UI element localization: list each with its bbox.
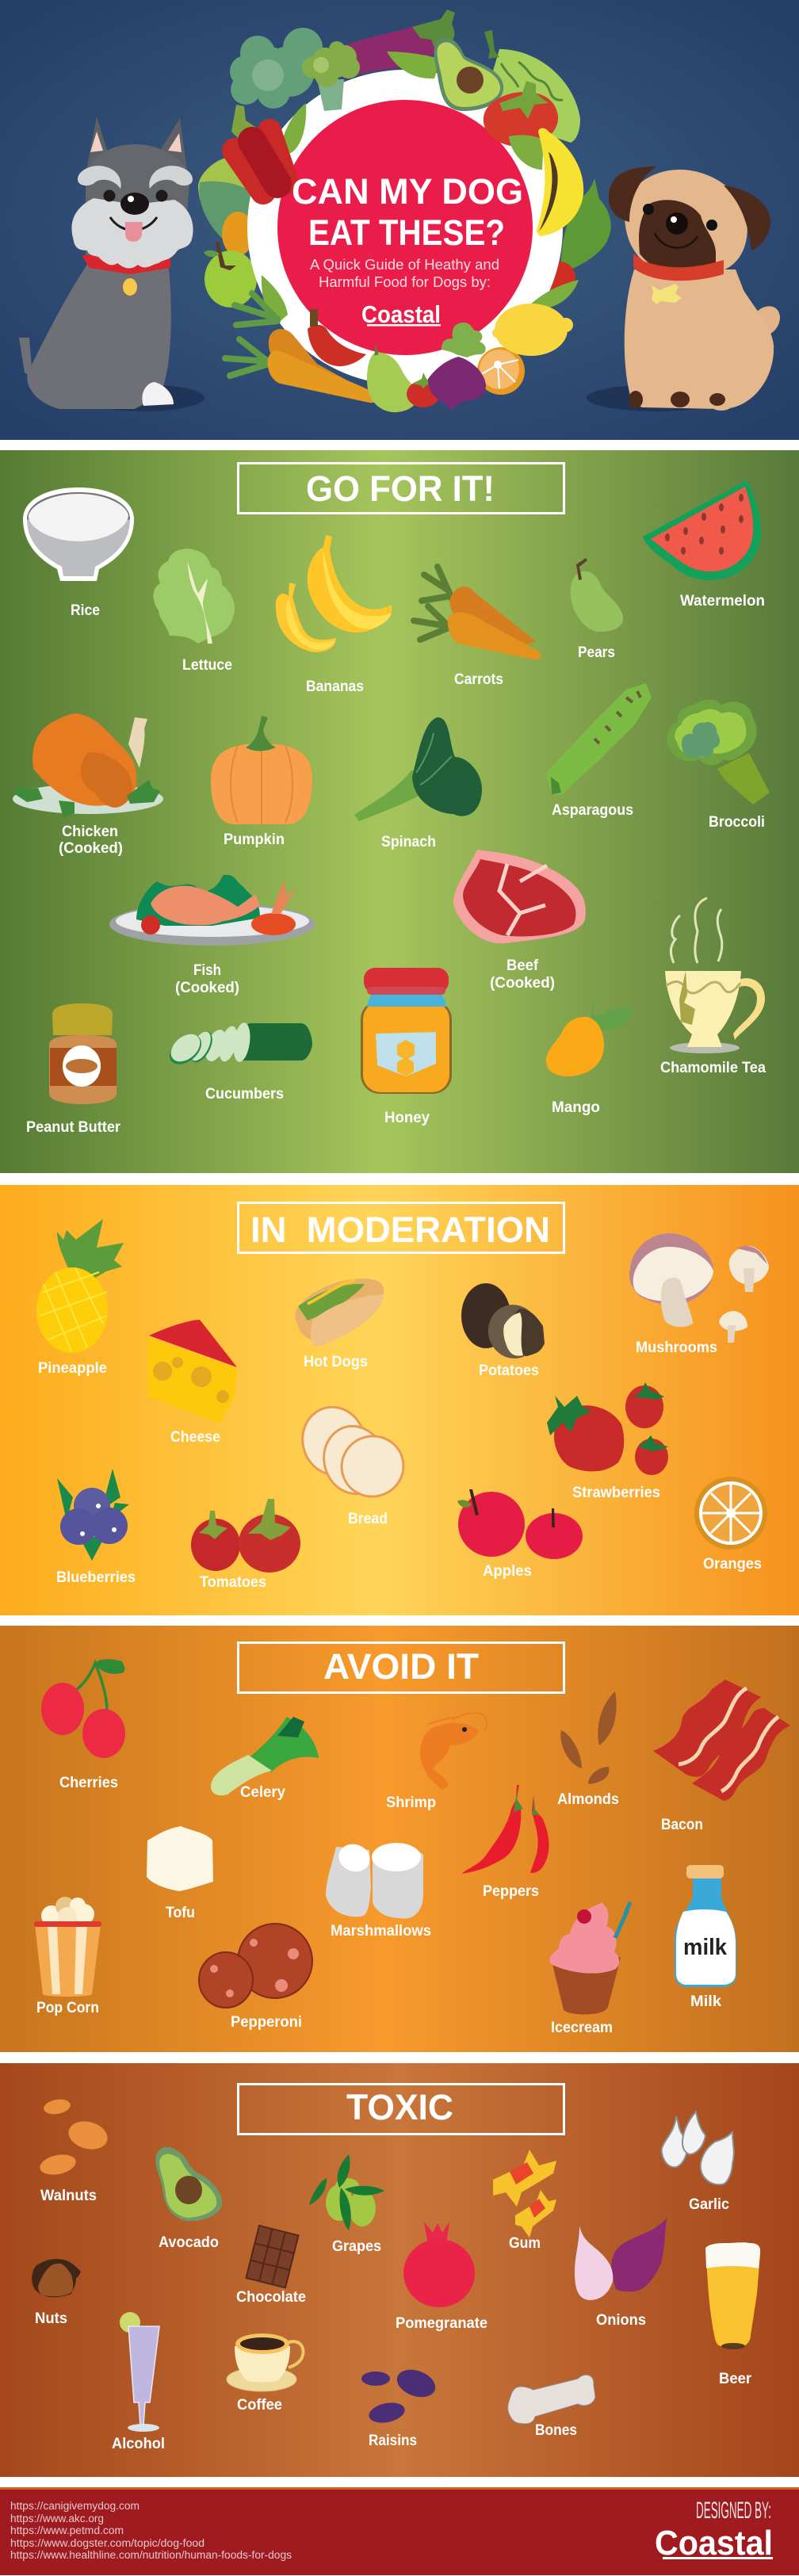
icon: cabbage xyxy=(198,158,254,243)
text: sources xyxy=(10,2500,292,2561)
icon: shrimp xyxy=(420,1713,487,1790)
icon: potatoes xyxy=(461,1283,545,1364)
icon: avocado half xyxy=(434,37,503,111)
icon: carrots xyxy=(414,567,541,659)
icon: blueberries xyxy=(57,1469,129,1561)
icon: lemon xyxy=(492,304,573,356)
label: strawberries: Strawberries xyxy=(572,1485,660,1501)
panel: header xyxy=(0,0,799,440)
label: bananas: Bananas xyxy=(306,678,364,695)
icon: peanut butter xyxy=(49,1003,117,1104)
label: apples: Apples xyxy=(483,1563,532,1580)
label: nuts: Nuts xyxy=(35,2310,67,2327)
icon: eggplant xyxy=(337,10,455,79)
text: eat these: EAT THESE? xyxy=(308,212,505,253)
label: beef cooked: Beef xyxy=(507,957,539,974)
icon: milk bottle: milk xyxy=(683,1935,728,1960)
icon: coffee cup xyxy=(227,2333,303,2391)
icon: left leaves xyxy=(225,275,288,376)
text: sources: https://www.akc.org xyxy=(10,2513,104,2524)
icon: green pepper stem xyxy=(231,105,255,143)
text: sources: https://www.petmd.com xyxy=(10,2524,124,2536)
icon: broccoli light xyxy=(302,41,360,111)
icon: mushrooms xyxy=(629,1233,769,1343)
label: shrimp: Shrimp xyxy=(386,1794,436,1811)
heading: toxic: TOXIC xyxy=(346,2087,453,2127)
icon: pear xyxy=(571,558,623,632)
label: avocado: Avocado xyxy=(159,2234,219,2251)
heading: go for it: GO FOR IT! xyxy=(306,468,495,509)
icon: tomato xyxy=(484,81,558,147)
label: hot dogs: Hot Dogs xyxy=(304,1354,368,1370)
icon: bananas xyxy=(276,535,392,652)
icon: cherries xyxy=(41,1659,125,1758)
label: grapes: Grapes xyxy=(332,2238,381,2255)
icon: small tomato right xyxy=(544,262,575,293)
icon: alcohol flute xyxy=(120,2312,159,2432)
icon: leaf xyxy=(387,52,441,78)
subtitle line 2: Harmful Food for Dogs by: xyxy=(319,274,491,290)
label: peanut butter: Peanut Butter xyxy=(26,1119,121,1136)
icon: hot dog xyxy=(295,1278,384,1346)
label: cherries: Cherries xyxy=(59,1775,118,1791)
icon: beef xyxy=(453,850,586,943)
icon: bone xyxy=(508,2375,595,2424)
label: beer: Beer xyxy=(719,2371,752,2387)
panel: in moderation xyxy=(0,1185,799,1615)
label: fish cooked xyxy=(175,962,239,996)
icon: pineapple xyxy=(36,1219,124,1353)
icon: asparagus xyxy=(546,683,652,795)
icon: green pepper right xyxy=(560,178,611,273)
label: gum: Gum xyxy=(509,2235,541,2252)
label: lettuce: Lettuce xyxy=(182,657,232,674)
icon: pear xyxy=(367,345,418,412)
text: sources: https://www.dogster.com/topic/dog-food xyxy=(10,2537,205,2549)
label: chocolate: Chocolate xyxy=(236,2289,306,2306)
icon: spinach xyxy=(354,717,482,821)
label: beef cooked: (Cooked) xyxy=(490,975,555,992)
icon: broccoli dark xyxy=(230,28,323,109)
label: almonds: Almonds xyxy=(557,1791,619,1808)
icon: red bell pepper xyxy=(235,131,287,192)
text: sources: https://www.healthline.com/nutrition/human-foods-for-dogs xyxy=(10,2549,292,2561)
heading: toxic xyxy=(238,2085,564,2134)
icon: honey jar xyxy=(361,968,452,1094)
icon: beer xyxy=(705,2242,760,2349)
icon: cupcake xyxy=(549,1902,630,2015)
heading: go for it xyxy=(238,463,564,514)
label: alcohol: Alcohol xyxy=(112,2436,165,2452)
icon: white plate ring xyxy=(247,70,563,385)
label: bread: Bread xyxy=(348,1511,388,1527)
label: pineapple: Pineapple xyxy=(38,1360,107,1377)
icon: chocolate bar xyxy=(247,2226,298,2287)
icon: tofu xyxy=(147,1826,213,1891)
icon: rice bowl xyxy=(23,487,134,581)
label: marshmallows: Marshmallows xyxy=(331,1923,431,1940)
icon: leaf right bottom xyxy=(527,280,579,308)
icon: apples xyxy=(457,1489,583,1559)
label: broccoli: Broccoli xyxy=(709,814,765,831)
icon: walnuts xyxy=(38,2097,111,2178)
logo: coastal footer: Coastal xyxy=(655,2524,773,2563)
icon: leaf under banana xyxy=(509,135,544,170)
label: milk: Milk xyxy=(690,1993,721,2010)
label: blueberries: Blueberries xyxy=(56,1569,136,1586)
label: spinach: Spinach xyxy=(381,834,436,850)
label: raisins: Raisins xyxy=(369,2433,417,2449)
label: chicken cooked xyxy=(59,824,123,857)
label: peppers: Peppers xyxy=(483,1883,539,1900)
label: tofu: Tofu xyxy=(166,1905,195,1921)
label: fish cooked: Fish xyxy=(193,962,221,979)
icon: marshmallows xyxy=(326,1840,423,1919)
panel: go for it xyxy=(0,450,799,1173)
label: walnuts: Walnuts xyxy=(40,2188,97,2204)
logo: coastal: Coastal xyxy=(361,300,441,328)
label: pomegranate: Pomegranate xyxy=(396,2315,487,2332)
icon: orange slice xyxy=(477,347,525,395)
icon: green apple xyxy=(204,242,257,308)
text: sources: https://canigivemydog.com xyxy=(10,2500,140,2512)
icon: roast chicken xyxy=(13,713,163,818)
icon: leaf left xyxy=(281,103,306,154)
label: cheese: Cheese xyxy=(170,1429,220,1446)
icon: gum candies xyxy=(493,2150,556,2238)
panel: toxic xyxy=(0,2063,799,2477)
heading: avoid it: AVOID IT xyxy=(323,1646,479,1687)
icon: acorn nut xyxy=(32,2259,81,2297)
label: tomatoes: Tomatoes xyxy=(200,1574,266,1591)
label: mango: Mango xyxy=(552,1099,600,1116)
icon: schnauzer dog xyxy=(19,117,205,411)
label: celery: Celery xyxy=(240,1784,285,1801)
icon: mango xyxy=(546,1001,633,1076)
label: icecream: Icecream xyxy=(551,2020,613,2036)
subtitle: A Quick Guide of Heathy and xyxy=(310,257,499,273)
label: pumpkin: Pumpkin xyxy=(224,831,285,848)
icon: watermelon slice xyxy=(643,480,761,580)
icon: garlic xyxy=(662,2112,734,2184)
icon: cucumbers xyxy=(164,1022,312,1070)
icon: lettuce xyxy=(153,548,235,644)
label: honey: Honey xyxy=(384,1110,430,1126)
label: potatoes: Potatoes xyxy=(479,1363,539,1379)
icon: lower carrot xyxy=(268,350,377,403)
icon: orange slice xyxy=(694,1477,767,1550)
label: watermelon: Watermelon xyxy=(680,593,765,610)
icon: orange left xyxy=(222,212,254,256)
icon: cheese xyxy=(148,1320,237,1424)
label: asparagus: Asparagous xyxy=(552,802,633,819)
icon: popcorn xyxy=(34,1897,101,1997)
icon: pug dog xyxy=(587,166,780,411)
icon: chili peppers xyxy=(462,1785,549,1874)
label: bacon: Bacon xyxy=(661,1817,703,1833)
icon: upper carrot xyxy=(269,329,380,399)
label: carrots: Carrots xyxy=(454,671,503,688)
label: garlic: Garlic xyxy=(689,2196,729,2213)
label: chicken cooked: (Cooked) xyxy=(59,840,123,857)
icon: fish plate xyxy=(109,875,315,946)
panel: avoid it xyxy=(0,1626,799,2052)
label: bones: Bones xyxy=(535,2422,577,2439)
icon: strawberries xyxy=(547,1382,668,1475)
icon: red disc xyxy=(277,100,533,355)
title xyxy=(292,171,523,328)
icon: onions xyxy=(575,2218,667,2300)
label: coffee: Coffee xyxy=(237,2397,282,2414)
label: rice: Rice xyxy=(71,602,100,619)
icon: almonds xyxy=(560,1691,617,1784)
icon: bread xyxy=(295,1400,411,1504)
icon: pumpkin xyxy=(211,716,312,824)
label: pop corn: Pop Corn xyxy=(36,2000,99,2016)
icon: tomatoes xyxy=(191,1499,300,1573)
icon: raisins xyxy=(361,2364,439,2426)
icon: pomegranate xyxy=(403,2222,475,2307)
icon: tomato bottom xyxy=(407,373,440,407)
icon: pepperoni xyxy=(199,1924,312,2008)
icon: grapes olive branch xyxy=(309,2154,384,2230)
label: fish cooked: (Cooked) xyxy=(175,980,239,996)
heading: avoid it xyxy=(238,1642,564,1693)
icon: banana xyxy=(537,128,583,236)
label: chicken cooked: Chicken xyxy=(62,824,118,840)
label: chamomile tea: Chamomile Tea xyxy=(660,1060,766,1076)
label: onions: Onions xyxy=(596,2312,646,2329)
icon: avocado xyxy=(155,2147,222,2221)
label: beef cooked xyxy=(490,957,555,992)
label: pepperoni: Pepperoni xyxy=(231,2014,302,2031)
label: mushrooms: Mushrooms xyxy=(636,1340,717,1356)
icon: celery xyxy=(211,1717,319,1795)
heading: in moderation: IN MODERATION xyxy=(250,1210,550,1250)
icon: watermelon xyxy=(484,30,580,143)
icon: chamomile tea xyxy=(665,898,765,1053)
label: cucumbers: Cucumbers xyxy=(205,1086,284,1103)
text: can my dog: CAN MY DOG xyxy=(292,171,523,212)
icon: broccoli xyxy=(667,699,770,805)
label: oranges: Oranges xyxy=(703,1556,762,1573)
icon: milk bottle xyxy=(675,1865,736,1987)
icon: bacon xyxy=(653,1680,790,1801)
label: pears: Pears xyxy=(578,644,615,661)
panel: footer xyxy=(0,2487,799,2575)
icon: beet xyxy=(428,323,486,411)
icon: red chili xyxy=(308,309,366,366)
